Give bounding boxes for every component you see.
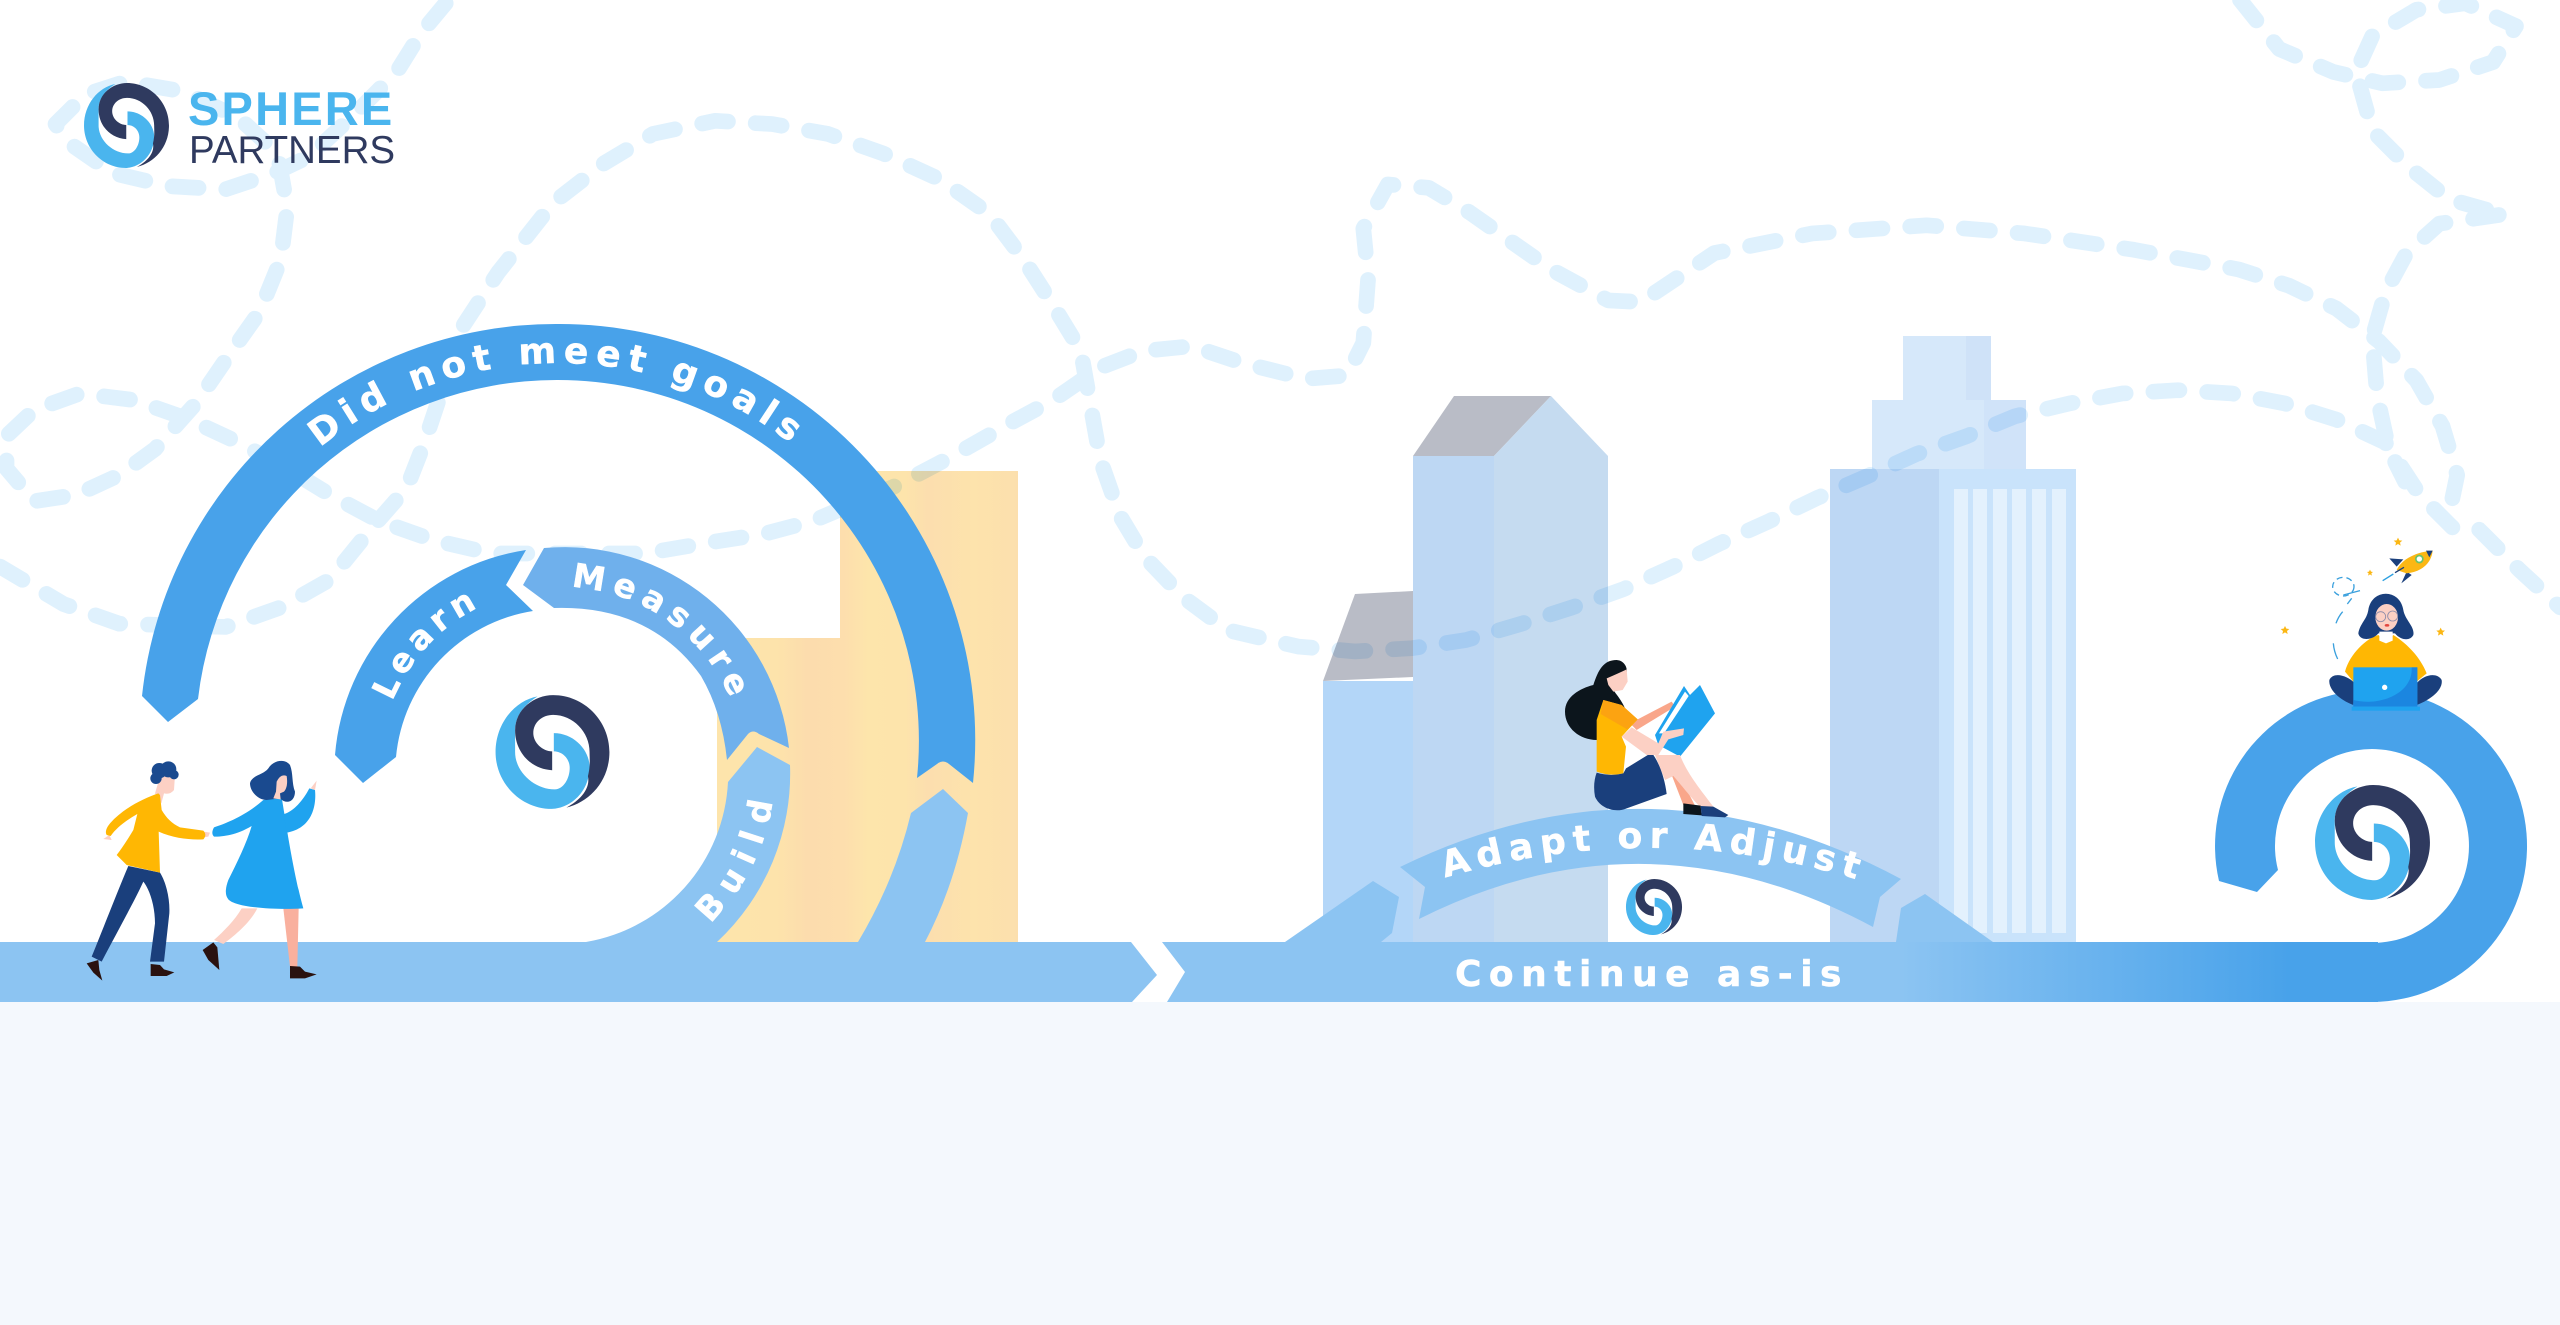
- yellow buildings: [717, 471, 1018, 942]
- woman: [203, 761, 317, 978]
- brand name: [188, 82, 395, 172]
- arc: Build: [586, 747, 790, 942]
- arc: Learn: Learn: [371, 594, 476, 699]
- blue tower, right: [1830, 336, 2076, 942]
- arc: Learn: [335, 550, 533, 783]
- arc: Build: Build: [694, 800, 772, 922]
- arc: lower segment of big loop: [858, 789, 968, 942]
- legs: [2329, 675, 2442, 705]
- brand name: SPHERE: [188, 82, 394, 135]
- brand name: PARTNERS: [189, 129, 395, 172]
- logo mark: header: [84, 83, 169, 168]
- flight trail: [2333, 577, 2360, 659]
- dashed journey paths: [0, 0, 2560, 651]
- logo mark: right spiral: [2315, 785, 2430, 900]
- arc: Did not meet goals: [142, 324, 976, 783]
- head and hair: [2358, 594, 2414, 643]
- arc: Did not meet goals: Did not meet goals: [306, 342, 800, 446]
- man: [87, 761, 210, 981]
- floor band, right segment: [1162, 942, 2378, 1002]
- spiral, right: [2215, 690, 2527, 1002]
- label: Continue as-is: Continue as-is: [1455, 954, 1849, 995]
- illustration: couple walking: [87, 761, 317, 981]
- rocket: [2383, 551, 2433, 583]
- illustration: woman reading: [1565, 660, 1728, 817]
- floor band, left segment: [0, 942, 1157, 1002]
- sweater: [2345, 635, 2427, 682]
- stars: [2281, 538, 2445, 636]
- laptop: [2352, 667, 2420, 711]
- banner: Adapt or Adjust: [1400, 808, 1901, 927]
- arc: Measure: [523, 547, 789, 760]
- banner: Adapt or Adjust: Adapt or Adjust: [1444, 824, 1862, 880]
- illustration: woman with laptop and rocket: [2281, 538, 2445, 711]
- blue buildings, left pair: [1323, 396, 1608, 942]
- logo mark: under arch: [1626, 879, 1682, 935]
- arch supports: [1285, 881, 1993, 942]
- arc: Measure: Measure: [574, 562, 744, 696]
- logo mark: inner spiral: [496, 695, 609, 809]
